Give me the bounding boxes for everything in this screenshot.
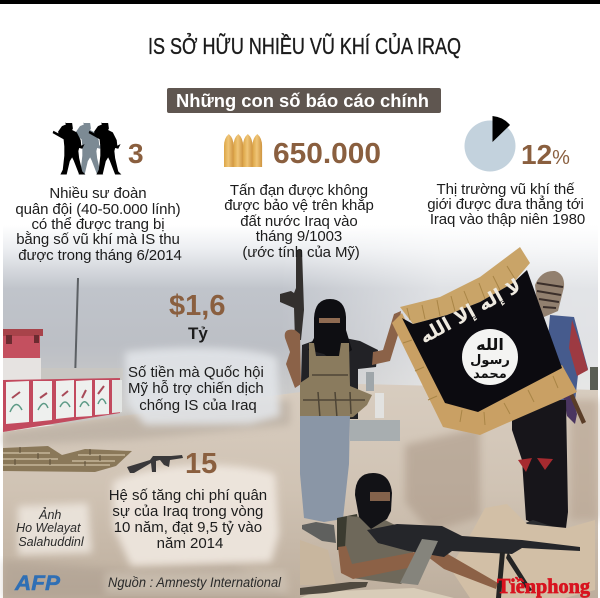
icon: pie chart (464, 116, 516, 172)
far building (41, 368, 123, 380)
head (355, 473, 392, 529)
ammo belt (400, 539, 438, 585)
faded panel behind $1,6 text (125, 348, 280, 425)
left arm (285, 330, 301, 388)
stick (564, 382, 586, 424)
ground (3, 384, 598, 598)
mast (74, 278, 79, 380)
title: IS SỞ HỮU NHIỀU VŨ KHÍ CỦA IRAQ (148, 31, 461, 59)
faded panel behind source (105, 570, 289, 594)
stat: $1.6 billion (128, 290, 268, 414)
vest (345, 516, 417, 584)
tripod (496, 552, 532, 598)
cloth (402, 270, 562, 412)
right fighter (507, 271, 588, 543)
number 12%: 12% (521, 139, 570, 170)
Tien Phong logo: Tiềnphong (497, 574, 590, 598)
shirt (337, 514, 363, 550)
number 3: 3 (128, 138, 144, 169)
description: Tấn đạn được không (230, 182, 368, 199)
source: Nguồn : Amnesty International (108, 575, 282, 590)
description: có thể được trang bị (31, 216, 164, 233)
stat: 650.000 tons (224, 134, 381, 261)
number 15: 15 (185, 448, 217, 480)
left fighter (280, 250, 401, 543)
red tower (3, 329, 43, 380)
trousers (300, 416, 350, 522)
section heading pill: Những con số báo cáo chính (176, 91, 429, 111)
photo credit: Ho Welayat (16, 521, 81, 535)
background photo (3, 225, 598, 598)
strap (563, 392, 577, 424)
description: được bảo vệ trên khắp (224, 197, 374, 214)
painted barrier wall (3, 378, 122, 432)
top fringe (400, 247, 530, 324)
top black bar (0, 0, 600, 4)
sandbags foreground (300, 504, 595, 598)
machine gun (367, 524, 580, 557)
icon: rifle (127, 455, 183, 473)
seal (462, 329, 518, 385)
black flag: رسول (470, 353, 510, 368)
sandbags (3, 446, 132, 472)
shirt (547, 315, 588, 410)
description: Thị trường vũ khí thế (437, 181, 575, 198)
description: chống IS của Iraq (139, 397, 257, 414)
side and bottom fringe (392, 313, 577, 435)
icon: bullets (224, 134, 262, 167)
description: đất nước Iraq vào (240, 213, 358, 230)
head scarf (535, 271, 564, 317)
faded panel behind 15 text (113, 465, 279, 566)
background equipment (350, 372, 400, 441)
description: Mỹ hỗ trợ chiến dịch (128, 380, 264, 397)
stat: 3 divisions (15, 122, 185, 264)
faded panel behind credit (18, 503, 92, 555)
AFP logo: AFP (14, 572, 61, 595)
black flag: محمد (473, 367, 507, 382)
description: sự của Iraq trong vòng (112, 503, 263, 520)
black flag (392, 247, 577, 435)
description: Số tiền mà Quốc hội (128, 364, 264, 381)
boots (507, 520, 558, 543)
description: Nhiều sư đoàn (49, 185, 147, 202)
vest (300, 343, 372, 421)
torso (300, 335, 378, 419)
black flag: الله (476, 335, 504, 354)
stat: factor 15 (109, 448, 271, 552)
description: (ước tính của Mỹ) (242, 244, 360, 261)
photo credit: Salahuddinl (18, 535, 85, 549)
description: năm 2014 (157, 535, 223, 552)
stat: 12 percent (427, 116, 588, 228)
description: được trong tháng 6/2014 (18, 247, 182, 264)
amount: $1,6 (169, 290, 225, 322)
description: giới được đưa thẳng tới (427, 195, 584, 213)
description: 10 năm, đạt 9,5 tỷ vào (114, 519, 262, 536)
raised arm (372, 311, 401, 365)
unit: Tỷ (188, 324, 208, 343)
description: Iraq vào thập niên 1980 (430, 211, 585, 228)
icon: soldiers (53, 122, 121, 174)
seated gunner (300, 473, 580, 598)
description: bằng số vũ khí mà IS thu (16, 231, 180, 248)
boots (302, 522, 336, 543)
trousers (512, 400, 568, 528)
rifle (280, 250, 304, 340)
number 650.000: 650.000 (273, 138, 381, 170)
ammunition strip (300, 582, 368, 595)
arms (338, 546, 423, 579)
description: tháng 9/1003 (256, 228, 342, 245)
distant trees (590, 367, 598, 390)
sky (3, 225, 598, 425)
head (308, 299, 352, 362)
flag inscription: لا إله إلا الله (416, 274, 525, 348)
photo credit: Ảnh (38, 507, 61, 522)
description: Hệ số tăng chi phí quân (109, 487, 267, 504)
description: quân đội (40-50.000 lính) (15, 201, 181, 218)
